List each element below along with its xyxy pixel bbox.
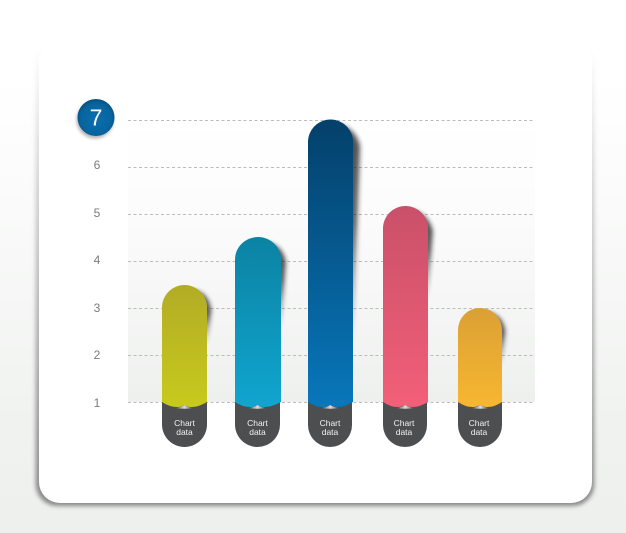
- data tab 1: Chart: [174, 418, 196, 428]
- data tab 2: Chart: [247, 418, 269, 428]
- bar 4: [383, 206, 433, 447]
- y axis labels: 4: [94, 253, 101, 267]
- data tab 4: data: [396, 427, 413, 437]
- data tab 4: Chart: [394, 418, 415, 428]
- y axis labels: 6: [94, 158, 101, 172]
- data tab 3: data: [322, 427, 339, 437]
- y axis labels: 3: [94, 301, 101, 315]
- data tab 1: data: [176, 427, 193, 437]
- y axis labels: 1: [94, 396, 101, 410]
- bar 1: [162, 285, 212, 447]
- data tab 2: data: [249, 427, 266, 437]
- data tab 2: [235, 400, 280, 447]
- bar 2: [235, 237, 286, 447]
- data tab 3: [308, 400, 352, 447]
- data tab 5: data: [471, 427, 488, 437]
- y axis labels: 2: [94, 348, 101, 362]
- bar 3: [308, 120, 360, 447]
- panel: card: [36, 40, 594, 506]
- data tab 5: Chart: [469, 418, 490, 428]
- plot background: [128, 121, 535, 402]
- data tab 5: [458, 400, 502, 447]
- icon: value badge 7: 7: [90, 104, 102, 130]
- bar 5: [458, 308, 506, 447]
- data tab 4: [383, 400, 427, 447]
- icon: value badge 7: [76, 99, 114, 138]
- y axis labels: 5: [94, 206, 101, 220]
- grid lines: [128, 120, 535, 402]
- y axis labels: [94, 158, 101, 410]
- data tab 3: Chart: [320, 418, 341, 428]
- data tab 1: [162, 400, 207, 447]
